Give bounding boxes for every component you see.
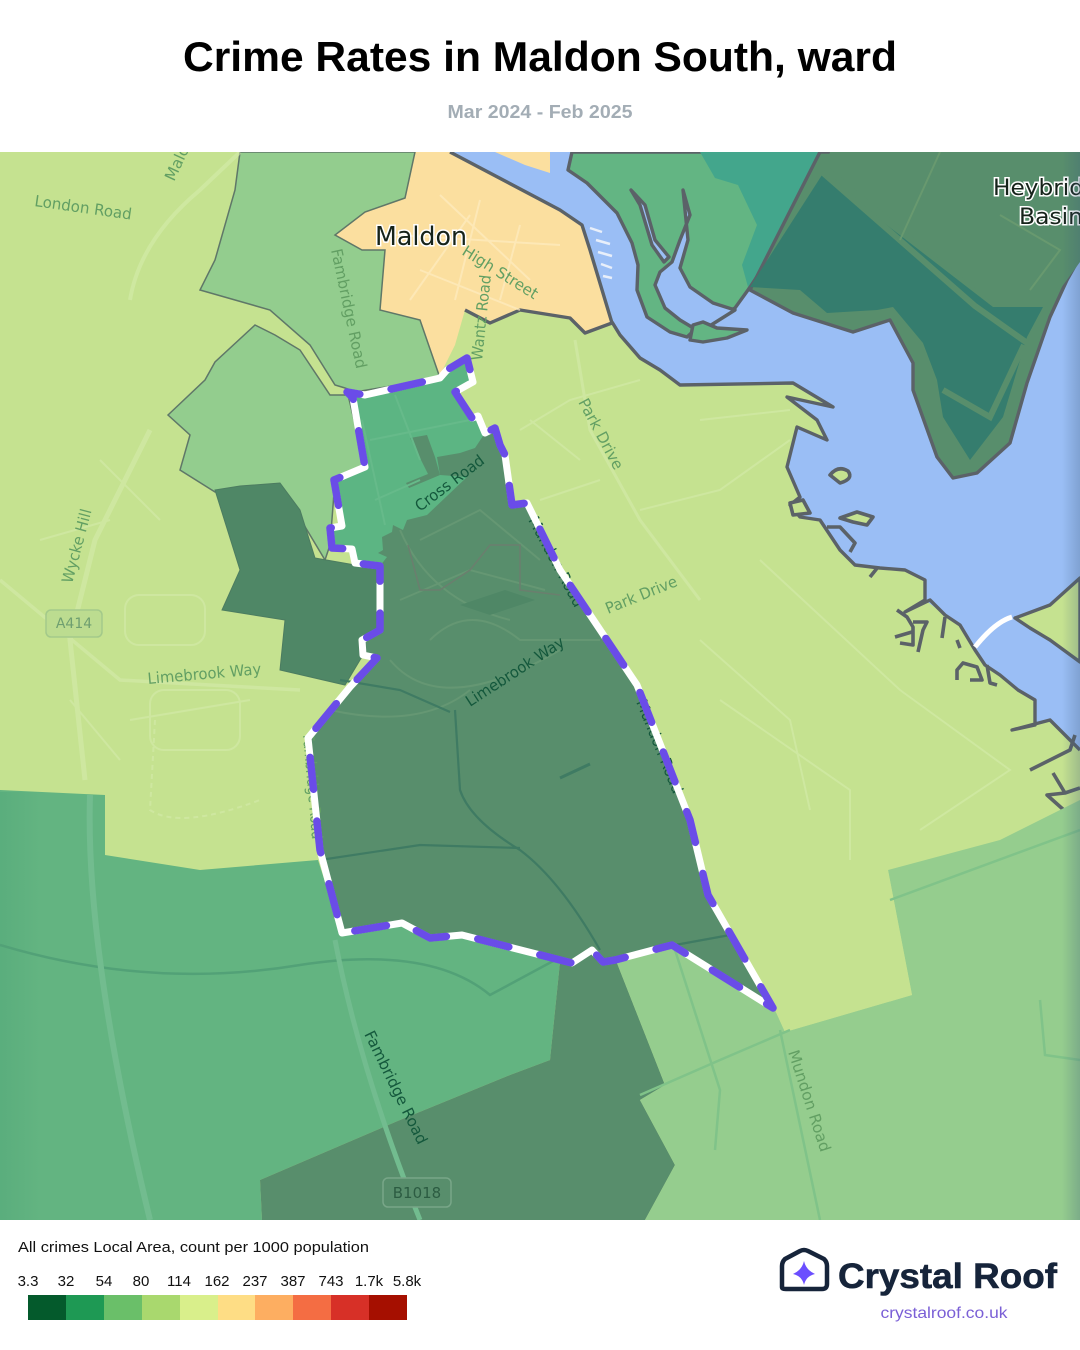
map region: ward boundary purple dashes <box>308 358 773 1008</box>
map region: ward street and stream lines <box>330 395 600 717</box>
map region: marina jetties <box>590 228 612 278</box>
map region: small islet <box>690 322 747 342</box>
map region: Maldon street network <box>395 195 560 310</box>
road labels: Park Drive <box>603 573 680 618</box>
map region: narrow inlet <box>631 190 669 262</box>
legend scale labels: 237 <box>242 1273 268 1290</box>
map region: north-east area <box>830 152 1080 286</box>
road labels <box>33 125 834 1154</box>
road labels: Limebrook Way <box>147 660 262 688</box>
road labels: Wantz Road <box>468 274 495 361</box>
date range subtitle: Mar 2024 - Feb 2025 <box>448 102 632 122</box>
legend title: All crimes Local Area, count per 1000 population <box>18 1239 369 1256</box>
road labels: Fambridge Road <box>360 1028 431 1147</box>
road labels: Maldon <box>161 125 201 184</box>
legend scale labels: 743 <box>318 1273 344 1290</box>
map region: Heybridge marsh <box>750 152 1080 478</box>
map region: faint roads <box>0 152 1010 860</box>
map region: east bank land <box>1015 578 1080 662</box>
legend scale labels: 32 <box>58 1273 74 1290</box>
road labels: Wycke Hill <box>58 507 96 585</box>
road labels: Mundon Road <box>524 513 587 610</box>
legend scale labels <box>18 1273 422 1290</box>
map region: south streams <box>0 795 1080 1220</box>
map region: Maldon town centre <box>335 152 612 375</box>
legend scale labels: 80 <box>133 1273 149 1290</box>
brand name: Crystal Roof <box>838 1257 1057 1296</box>
map region: north land <box>566 152 757 339</box>
road labels: Fambridge Road <box>327 247 370 370</box>
title: Crime Rates in Maldon South, ward <box>183 33 897 80</box>
map region: inlet marks on coast <box>790 469 1080 820</box>
road labels: London Road <box>33 192 133 224</box>
map region: ward dark block <box>406 435 440 488</box>
legend colour scale <box>28 1295 407 1320</box>
map region: south dark area <box>260 950 675 1220</box>
icon: Crystal Roof house logo <box>782 1250 827 1289</box>
road labels: High Street <box>459 242 541 303</box>
map region: north-west ward <box>200 152 440 392</box>
website link: crystalroof.co.uk <box>880 1305 1009 1322</box>
road labels: Mundon Road <box>784 1048 834 1154</box>
road badge: B1018: B1018 <box>393 1184 441 1202</box>
road badge: A414: A414 <box>56 616 92 632</box>
map region: light green wedge <box>776 870 912 1030</box>
map region: teal patch <box>700 152 825 287</box>
map label: Heybridge Basin: Basin <box>1019 205 1080 230</box>
road badge: A414 <box>46 610 102 637</box>
legend scale labels: 1.7k <box>355 1273 384 1290</box>
legend scale labels: 3.3 <box>18 1273 38 1290</box>
map region: west ward <box>168 325 365 560</box>
map region: estuary bay <box>655 190 735 332</box>
legend scale labels: 5.8k <box>393 1273 422 1290</box>
map region: marsh inner teal <box>750 175 1043 460</box>
map region: western dark area <box>215 483 380 685</box>
road labels: Mundon Road <box>632 697 686 796</box>
legend scale labels: 54 <box>96 1273 112 1290</box>
map region: south-east green area <box>615 800 1080 1220</box>
map edge shading <box>1064 152 1080 1220</box>
map region: ward fill dark <box>312 434 762 998</box>
map region: marsh sea wall <box>822 172 1030 417</box>
map label: Heybridge Basin <box>993 176 1080 230</box>
map region: ward boundary white <box>308 358 773 1008</box>
legend scale labels: 387 <box>280 1273 306 1290</box>
legend scale labels: 162 <box>204 1273 230 1290</box>
legend scale labels: 114 <box>167 1273 191 1290</box>
map region: south-west edge tint <box>0 792 4 1220</box>
map region: south-west green area <box>0 790 560 1220</box>
icon: bridge <box>975 617 1012 647</box>
map label: Maldon: Maldon <box>375 222 467 252</box>
road labels: Fambridge Road <box>299 734 326 840</box>
road badge: B1018 <box>383 1178 451 1207</box>
map region: ward north green zone <box>330 358 485 566</box>
road labels: Park Drive <box>574 395 627 473</box>
road labels: Cross Road <box>412 451 488 515</box>
map region: south-east coastline <box>612 322 1080 750</box>
road labels: Limebrook Way <box>462 633 568 710</box>
map region: water estuary <box>450 152 1080 750</box>
